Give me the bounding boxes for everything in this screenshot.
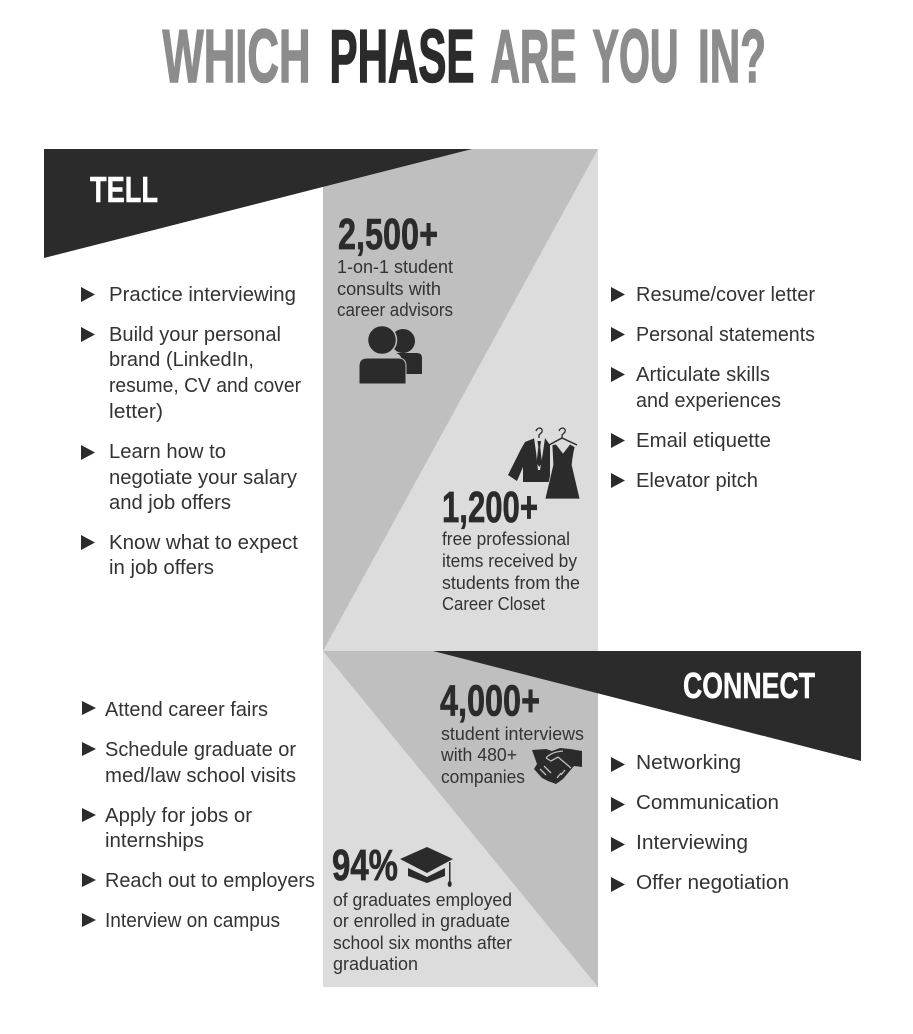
icon: handshake (532, 748, 582, 784)
stat: 1,200+ career closet: items received by (442, 550, 578, 571)
icon: two people (359, 326, 422, 384)
list: connect right column: Offer negotiation (636, 872, 789, 894)
stat: 1,200+ career closet (442, 483, 580, 614)
list: tell right column: Personal statements (636, 324, 815, 346)
stat: 94% graduates: or enrolled in graduate (333, 910, 510, 931)
list: connect right column: Communication (636, 792, 779, 814)
panel: connect statistics background (323, 651, 598, 987)
list: tell left column: letter) (109, 401, 163, 423)
stat: 4,000+ interviews: with 480+ (440, 744, 517, 765)
panel: tell statistics background (323, 149, 598, 651)
list: tell left column: brand (LinkedIn, (109, 349, 254, 371)
stat: 1,200+ career closet: 1,200+ (442, 483, 538, 532)
stat: 4,000+ interviews: companies (441, 766, 525, 787)
stat: 94% graduates: graduation (333, 953, 418, 974)
stat: 1,200+ career closet: students from the (442, 572, 580, 593)
stat: 94% graduates (332, 841, 512, 974)
list: tell left column: Build your personal (109, 324, 281, 346)
title (162, 14, 766, 98)
list: connect right column: Interviewing (636, 832, 748, 854)
list: connect right column (611, 752, 789, 894)
stat: 94% graduates: of graduates employed (333, 889, 512, 910)
stat: 4,000+ interviews: 4,000+ (440, 676, 540, 726)
banner: tell: TELL (90, 169, 158, 210)
list: tell left column: Know what to expect (109, 532, 298, 554)
list: tell left column: Learn how to (109, 441, 226, 463)
title: PHASE (330, 14, 474, 98)
stat: 1,200+ career closet: free professional (442, 528, 570, 549)
list: tell left column (81, 284, 301, 579)
stat: 4,000+ interviews (440, 676, 584, 787)
stat: 2,500+ consults: 1-on-1 student (337, 256, 453, 277)
list: connect left column (82, 699, 315, 932)
list: connect left column: Attend career fairs (105, 699, 268, 721)
list: tell left column: and job offers (109, 492, 231, 514)
banner: tell (44, 149, 472, 258)
icon: graduation cap (400, 847, 453, 887)
list: tell right column: Email etiquette (636, 430, 771, 452)
banner: connect (433, 651, 861, 761)
list: tell left column: resume, CV and cover (109, 375, 301, 397)
list: tell left column: Practice interviewing (109, 284, 296, 306)
list: connect left column: internships (105, 830, 204, 852)
list: tell right column: Articulate skills (636, 364, 770, 386)
list: tell left column: in job offers (109, 557, 214, 579)
list: tell right column: Elevator pitch (636, 470, 758, 492)
stat: 2,500+ consults: career advisors (337, 299, 453, 320)
stat: 94% graduates: school six months after (333, 932, 512, 953)
list: connect left column: med/law school visits (105, 765, 296, 787)
banner: connect: CONNECT (683, 665, 815, 706)
stat: 4,000+ interviews: student interviews (441, 723, 584, 744)
list: connect left column: Interview on campus (105, 910, 280, 932)
icon: suit and dress on hangers (508, 428, 580, 499)
stat: 2,500+ consults (337, 210, 453, 320)
list: connect right column: Networking (636, 752, 741, 774)
list: tell left column: negotiate your salary (109, 467, 297, 489)
stat: 94% graduates: 94% (332, 841, 398, 890)
list: tell right column (611, 284, 815, 492)
title: YOU (592, 14, 678, 98)
list: connect left column: Reach out to employers (105, 870, 315, 892)
list: connect left column: Schedule graduate or (105, 739, 296, 761)
stat: 2,500+ consults: consults with (337, 278, 441, 299)
title: ARE (490, 14, 576, 98)
list: tell right column: Resume/cover letter (636, 284, 815, 306)
title: IN? (698, 14, 766, 98)
title: WHICH (162, 14, 310, 98)
list: tell right column: and experiences (636, 390, 781, 412)
stat: 1,200+ career closet: Career Closet (442, 593, 545, 614)
list: connect left column: Apply for jobs or (105, 805, 252, 827)
stat: 2,500+ consults: 2,500+ (338, 210, 438, 259)
